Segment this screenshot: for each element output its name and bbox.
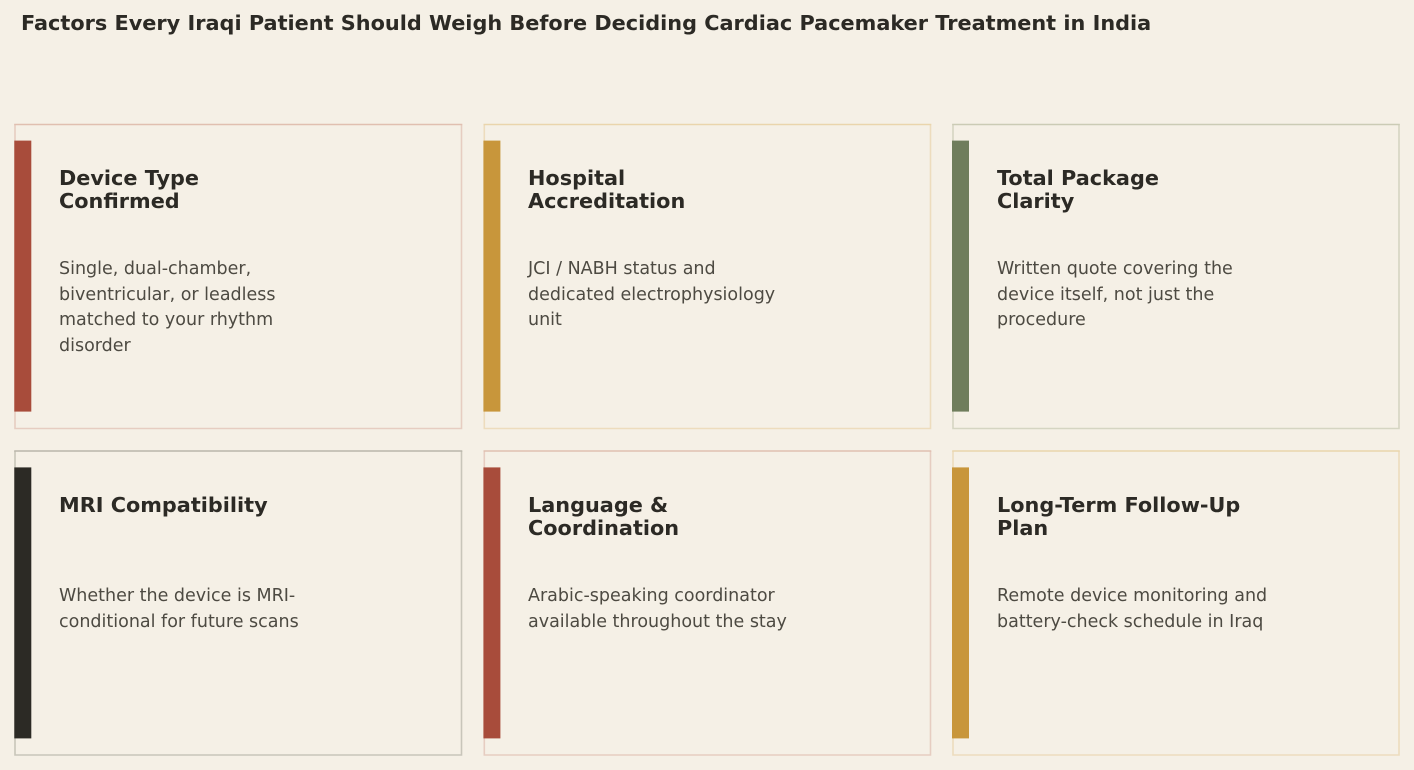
accent bar: black [14,467,31,738]
accent bar: red [14,141,31,412]
heading: device type: Device Type [59,166,199,190]
heading: language: Language & [528,493,668,517]
heading: hospital: Accreditation [528,189,685,213]
text: hospital: JCI / NABH status and [528,259,716,279]
accent bar: green [952,141,969,412]
text: hospital [527,259,775,330]
text: device type: biventricular, or leadless [59,285,276,305]
text: package: device itself, not just the [997,285,1214,305]
accent bar: red [483,467,500,738]
text: MRI: Whether the device is MRI- [59,586,295,606]
heading: device type: Confirmed [59,189,180,213]
heading: package: Clarity [997,189,1074,213]
heading: language: Coordination [528,516,679,540]
heading: hospital [528,166,685,213]
title: Factors Every Iraqi Patient Should Weigh Before Deciding Cardiac Pacemaker Treatment in India [21,10,1151,34]
heading: follow-up [997,493,1240,540]
text: hospital: dedicated electrophysiology [528,285,775,305]
text: device type: disorder [59,336,131,356]
panel: long-term follow-up plan [952,450,1400,756]
text: language: available throughout the stay [528,612,787,632]
text: MRI [59,586,299,632]
panel: language and coordination [483,450,932,756]
text: package: procedure [997,310,1086,330]
panel: MRI compatibility [14,450,462,756]
panel: device type confirmed [14,124,462,430]
heading: package: Total Package [997,166,1159,190]
text: follow-up: Remote device monitoring and [997,586,1267,606]
text: language [528,586,787,632]
heading: hospital: Hospital [528,166,625,190]
heading: follow-up: Plan [997,516,1048,540]
text: package [997,259,1233,330]
text: device type: matched to your rhythm [59,310,273,330]
text: device type: Single, dual-chamber, [59,259,251,279]
text: package: Written quote covering the [997,259,1233,279]
panel: hospital accreditation [483,124,932,430]
panel: total package clarity [952,124,1400,430]
text: follow-up [997,586,1267,632]
text: MRI: conditional for future scans [59,612,299,632]
heading: language [528,493,679,540]
accent bar: amber [952,467,969,738]
accent bar: amber [483,141,500,412]
text: device type [59,259,276,356]
heading: package [997,166,1159,213]
text: language: Arabic-speaking coordinator [528,586,775,606]
heading: device type [59,166,199,213]
text: follow-up: battery-check schedule in Iraq [997,612,1263,632]
text: hospital: unit [528,310,562,330]
heading: follow-up: Long-Term Follow-Up [997,493,1240,517]
heading: MRI: MRI Compatibility [59,493,268,517]
